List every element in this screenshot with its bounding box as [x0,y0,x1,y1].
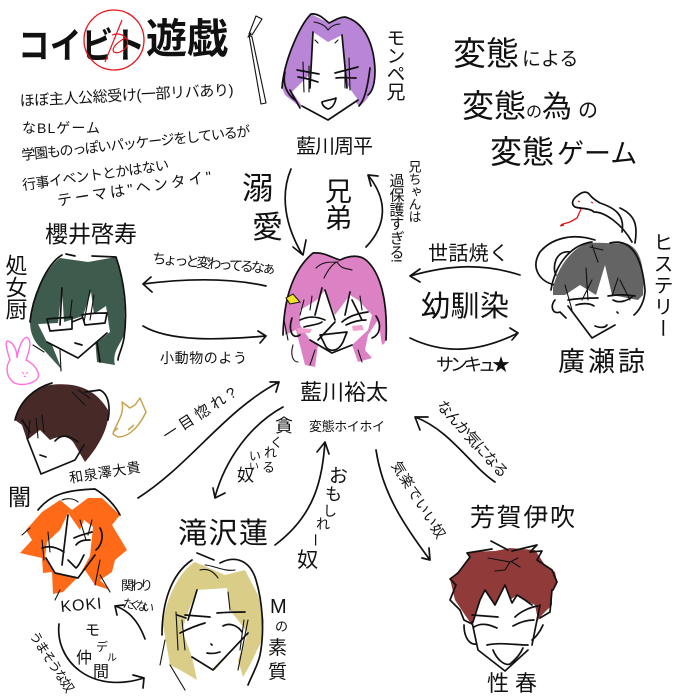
label: M tendencies: 素 [268,637,287,659]
title: コイビト [18,25,145,66]
arrow: model to KOKI [115,605,145,639]
label: model colleagues: デ [96,639,108,654]
icon: pink rabbit [6,337,38,384]
label: childhood friends: 幼馴染 [421,290,509,323]
description text: 行事イベントとかはない [21,157,170,193]
label: devouring guy: 貪 [275,416,293,436]
label: don't want to get involved: たくない [121,596,155,616]
label: model colleagues: 間 [93,664,109,681]
label: devouring guy: い [249,449,261,463]
label: interesting guy: し [323,503,337,519]
character: pink-haired Yuta face [283,253,386,367]
label: virgin fan: 処女厨 [2,254,28,320]
name: KOKI: KOKI [60,595,102,616]
arrow: Izumisawa to Yuta [138,382,279,498]
label: model colleagues [76,622,117,681]
label: like a small animal: 小動物のよう [160,350,247,366]
label: devouring guy: く [270,435,283,450]
label: interesting guy: れ [316,516,330,532]
label: M tendencies: M [270,596,287,618]
label: adolescence pun: 性春 [487,671,537,696]
name: Aikawa Yuta: 藍川裕太 [300,380,388,405]
label: somehow curious: なんか気になる [433,397,511,482]
label: thank you star: サンキュ★ [436,355,510,375]
label: devouring guy [237,416,293,485]
title: 遊戯 [146,16,228,62]
arrow: brother to Yuta [285,169,306,255]
heading: right tagline: 変態の為 の [462,88,598,124]
label: doting love: 愛 [252,210,283,245]
label: don't want to get involved [121,578,155,616]
label: overprotective [388,160,422,262]
label: interesting guy: お [329,466,348,487]
arrow: Yuta to brother [366,175,382,247]
label: pervert magnet: 変態ホイホイ [309,419,385,434]
arrow: Yuta to Takizawa [213,407,283,498]
label: brothers: 兄弟 [321,177,352,231]
label: doting love: 溺 [242,171,273,206]
arrow: Takizawa to Yuta [275,442,329,545]
icon: bendy straw [248,16,266,104]
label: interesting guy: ー [307,533,323,547]
label: easygoing guy: 気楽でいい奴 [388,458,449,541]
description text: ほぼ主人公総受け(一部リバあり) [19,82,234,110]
label: devouring guy: い [249,462,259,473]
label: M tendencies: の [275,619,288,634]
arrow: Yuta to Haga [376,450,430,560]
character: purple brother face [282,14,375,120]
label: don't want to get involved: 関わり [121,578,153,593]
heading: right tagline [453,35,637,170]
character: red-haired Haga face [450,541,557,671]
label: love at first sight: 一目惚れ? [160,384,240,444]
label: overprotective: 過保護すぎる! [388,173,404,262]
description text: 学園ものっぽいパッケージをしているが [21,123,251,163]
label: model colleagues: ル [107,653,117,664]
name: Haga Ibuki: 芳賀伊吹 [470,504,575,532]
icon: tan dog [113,398,146,437]
name: Takizawa Ren: 滝沢蓮 [178,517,268,550]
label: interesting guy [297,466,348,572]
name: Aikawa Shuhei: 藍川周平 [296,135,373,158]
label: overprotective: 兄ちゃんは [406,160,422,223]
character: brown-haired face [15,383,109,474]
arrow: KOKI to model [59,624,144,688]
label: hysteria: ヒステリー [650,232,672,340]
label: darkness: 闇 [8,484,31,510]
heading: right tagline: 変態ゲーム [490,134,637,170]
name: Hirose Ryo: 廣瀬諒 [558,347,645,377]
arrow: Yuta to Hirose [410,328,518,349]
name: Sakurai Keiju: 櫻井啓寿 [45,221,137,247]
label: interesting guy: 奴 [297,549,318,572]
character: orange-haired KOKI face [20,489,127,600]
description text [19,82,251,210]
character: gray-haired Hirose face with snake [536,192,645,338]
label: model colleagues: モ [85,622,100,639]
label: model colleagues: 仲 [76,649,92,667]
label: interesting guy: も [325,485,342,504]
name: Izumisawa Daiki: 和泉澤大貴 [68,459,142,486]
label: a little off: ちょっと変わってるなぁ [152,250,277,277]
arrow: Haga to Yuta [415,417,495,482]
label: caring: 世話焼く [428,242,509,265]
heading: right tagline: 変態による [453,35,578,72]
arrow: Yuta to Sakurai [143,277,266,292]
arrow: Hirose to Yuta [410,267,520,282]
title [18,10,228,70]
label: M tendencies: 質 [268,661,287,683]
label: looks tasty: うまそうな奴 [26,628,77,695]
label: monster parent brother: モンペ兄 [384,28,405,101]
label: devouring guy: れ [264,445,277,460]
label: doting love [242,171,283,245]
label: devouring guy: 奴 [237,466,254,485]
character: blonde-haired face [160,553,264,690]
description text: なBLゲーム [22,120,100,136]
label: M tendencies [268,596,288,683]
character: green-haired face [30,254,126,371]
label: devouring guy: る [262,460,275,475]
arrow: Sakurai to Yuta [143,326,266,343]
description text: テーマは"ヘンタイ" [56,169,213,210]
